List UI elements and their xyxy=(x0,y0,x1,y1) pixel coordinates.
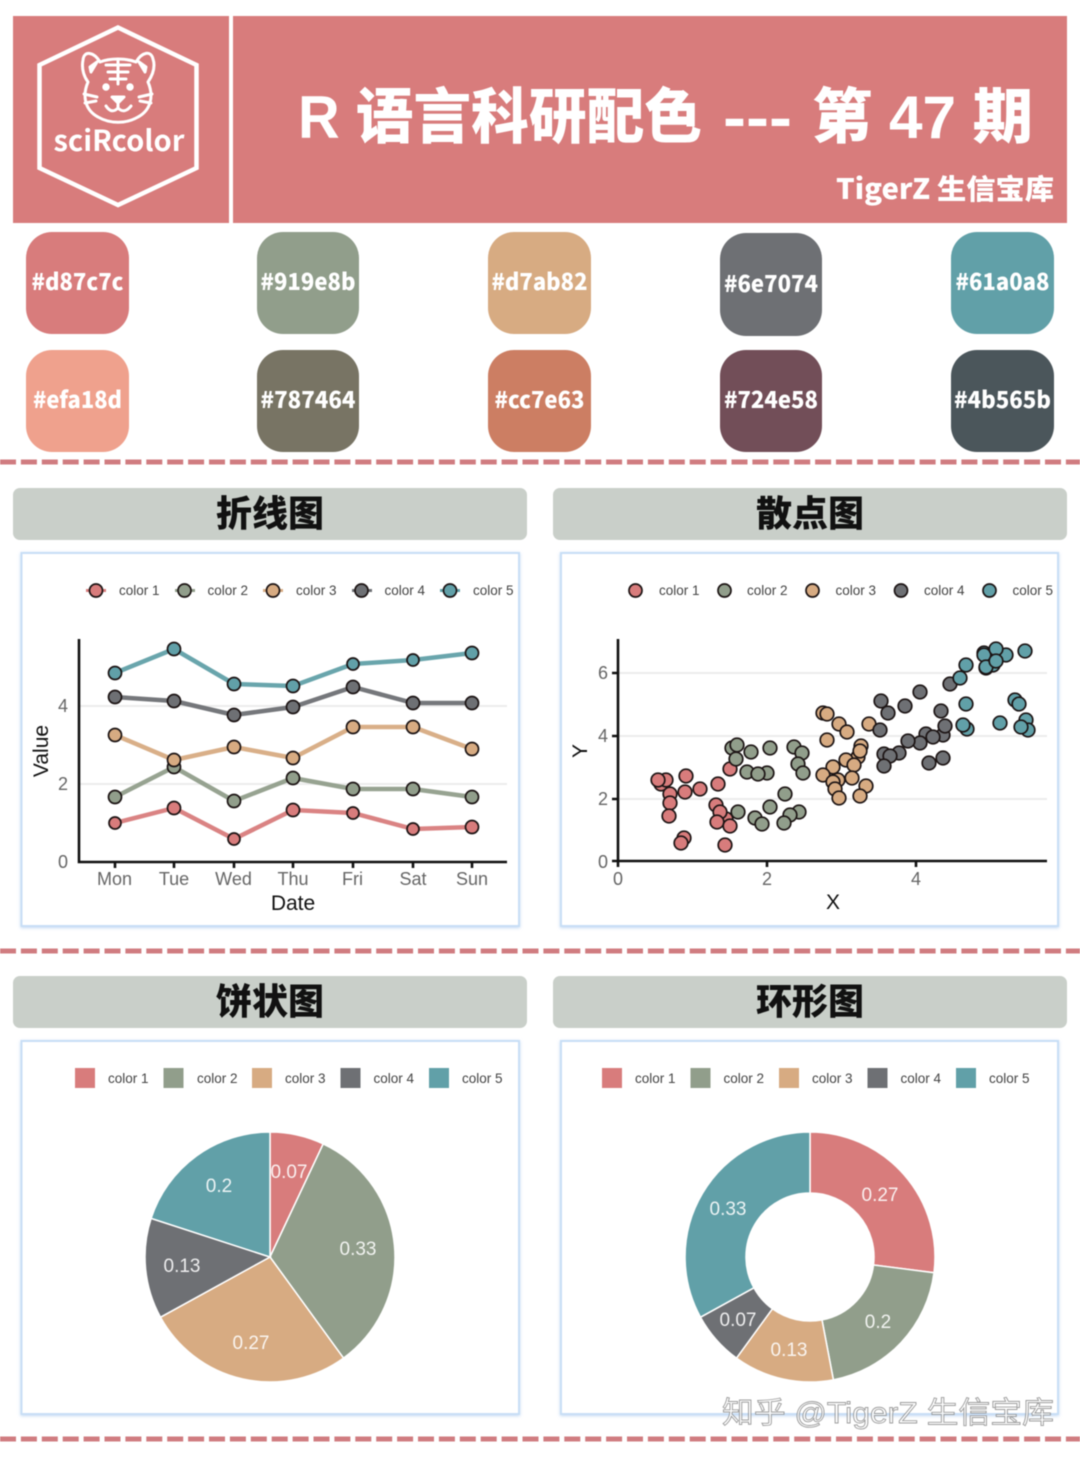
swatch: #cc7e63 xyxy=(488,350,591,452)
axis tick labels: Tue xyxy=(159,869,189,889)
axis title: Y: Y xyxy=(569,744,592,758)
watermark: 知乎 @TigerZ 生信宝库 xyxy=(722,1397,1054,1430)
swatch: #d7ab82 xyxy=(488,232,591,334)
series: color 3 xyxy=(108,720,478,766)
pie labels: 0.33 xyxy=(340,1239,376,1260)
panel: donut chart xyxy=(561,1041,1058,1414)
swatch: #6e7074 xyxy=(720,233,822,336)
heading: donut chart xyxy=(553,973,1067,1028)
axis tick labels: 6 xyxy=(598,663,608,683)
logo wordmark: sciRcolor xyxy=(54,118,185,160)
legend xyxy=(86,583,514,598)
swatch: #61a0a8 xyxy=(951,232,1054,334)
axes xyxy=(612,639,1047,867)
legend: color 5 xyxy=(989,1071,1030,1086)
legend: color 4 xyxy=(384,583,426,598)
points: color 4 xyxy=(873,661,993,773)
points: color 1 xyxy=(651,762,737,852)
heading: scatter plot xyxy=(553,485,1067,540)
donut labels: 0.2 xyxy=(865,1312,891,1333)
donut labels: 0.27 xyxy=(862,1185,898,1206)
heading: pie chart xyxy=(13,973,527,1028)
header: title panel xyxy=(233,16,1067,223)
axis tick labels: Thu xyxy=(277,869,309,889)
swatch: #724e58 xyxy=(720,350,822,452)
axis tick labels: Mon xyxy=(97,869,132,889)
pie labels: 0.2 xyxy=(206,1176,232,1197)
axis tick labels xyxy=(58,696,488,889)
axis tick labels: 2 xyxy=(58,774,68,794)
swatch: #d7ab82: #d7ab82 xyxy=(492,263,588,297)
header: logo panel xyxy=(13,16,229,223)
legend: color 3 xyxy=(296,583,337,598)
axis tick labels: 4 xyxy=(58,696,68,716)
legend: color 2 xyxy=(208,583,248,598)
legend: color 2 xyxy=(197,1071,238,1086)
series: color 2 xyxy=(108,760,478,808)
axis tick labels: 2 xyxy=(762,869,772,889)
axis tick labels: Sun xyxy=(456,869,488,889)
swatch: #4b565b: #4b565b xyxy=(954,381,1051,415)
pie labels: 0.13 xyxy=(164,1256,200,1277)
points: color 3 xyxy=(816,706,876,805)
donut labels xyxy=(710,1185,898,1361)
title: 第 47 期 xyxy=(812,84,1033,151)
panel: line chart xyxy=(22,553,519,926)
pie slices xyxy=(145,1132,395,1382)
axes xyxy=(79,639,507,868)
axis tick labels: Wed xyxy=(215,869,252,889)
legend: color 2 xyxy=(724,1071,764,1086)
swatch: #d87c7c: #d87c7c xyxy=(32,263,124,297)
legend xyxy=(602,1068,1030,1088)
axis tick labels: 0 xyxy=(598,852,608,872)
legend: color 4 xyxy=(924,583,965,598)
swatch: #919e8b: #919e8b xyxy=(260,263,356,297)
subtitle: TigerZ 生信宝库 xyxy=(836,168,1054,208)
legend: color 3 xyxy=(836,583,876,598)
points: color 2 xyxy=(725,738,810,831)
axis tick labels: Fri xyxy=(342,869,363,889)
heading: line chart xyxy=(13,485,527,540)
heading: pie chart: 饼状图 xyxy=(216,973,324,1025)
swatch: #d87c7c xyxy=(26,232,129,334)
panel: scatter plot xyxy=(561,553,1058,926)
swatch: #724e58: #724e58 xyxy=(724,381,818,415)
axis tick labels: 2 xyxy=(598,789,608,809)
heading: scatter plot: 散点图 xyxy=(756,485,864,537)
legend: color 5 xyxy=(462,1071,503,1086)
swatch: #efa18d xyxy=(26,350,129,452)
swatch: #787464 xyxy=(257,350,359,452)
axis tick labels: 4 xyxy=(598,726,608,746)
heading: line chart: 折线图 xyxy=(216,485,324,537)
legend: color 1 xyxy=(659,583,700,598)
donut labels: 0.13 xyxy=(771,1340,807,1361)
icon: hexagon outline xyxy=(40,28,196,205)
swatch: #919e8b xyxy=(257,232,359,334)
title: R 语言科研配色 xyxy=(298,84,702,151)
series: color 1 xyxy=(109,802,478,845)
legend xyxy=(75,1068,503,1088)
axis tick labels: 4 xyxy=(911,869,921,889)
axis tick labels: 0 xyxy=(613,869,623,889)
series: color 4 xyxy=(108,680,478,722)
axis title: Date: Date xyxy=(271,892,315,915)
axis title: X: X xyxy=(826,891,840,914)
legend: color 4 xyxy=(900,1071,942,1086)
swatch: #6e7074: #6e7074 xyxy=(724,265,818,299)
legend: color 5 xyxy=(473,583,514,598)
swatch: #cc7e63: #cc7e63 xyxy=(494,381,584,415)
legend xyxy=(629,583,1053,598)
panel: pie chart xyxy=(22,1041,519,1414)
icon: tiger face xyxy=(82,53,154,122)
pie labels: 0.07 xyxy=(271,1162,307,1183)
colour swatches xyxy=(26,232,1054,452)
legend: color 3 xyxy=(812,1071,853,1086)
title: --- xyxy=(723,84,792,151)
points: color 5 xyxy=(953,642,1035,737)
swatch: #787464: #787464 xyxy=(260,381,356,415)
pie labels: 0.27 xyxy=(233,1333,269,1354)
axis tick labels xyxy=(598,663,921,889)
legend: color 1 xyxy=(119,583,160,598)
pie labels xyxy=(164,1162,376,1354)
title xyxy=(298,84,1033,151)
legend: color 4 xyxy=(374,1071,415,1086)
legend: color 1 xyxy=(108,1071,149,1086)
donut labels: 0.07 xyxy=(720,1310,756,1331)
legend: color 3 xyxy=(285,1071,326,1086)
donut labels: 0.33 xyxy=(710,1199,746,1220)
swatch: #61a0a8: #61a0a8 xyxy=(956,263,1050,297)
legend: color 1 xyxy=(635,1071,676,1086)
series: color 5 xyxy=(108,642,478,692)
donut slices xyxy=(685,1132,935,1382)
axis title: Value: Value xyxy=(30,725,53,777)
heading: donut chart: 环形图 xyxy=(756,973,864,1025)
swatch: #efa18d: #efa18d xyxy=(33,381,122,415)
legend: color 2 xyxy=(747,583,788,598)
axis tick labels: Sat xyxy=(399,869,427,889)
axis tick labels: 0 xyxy=(58,852,68,872)
legend: color 5 xyxy=(1012,583,1053,598)
swatch: #4b565b xyxy=(951,350,1054,452)
